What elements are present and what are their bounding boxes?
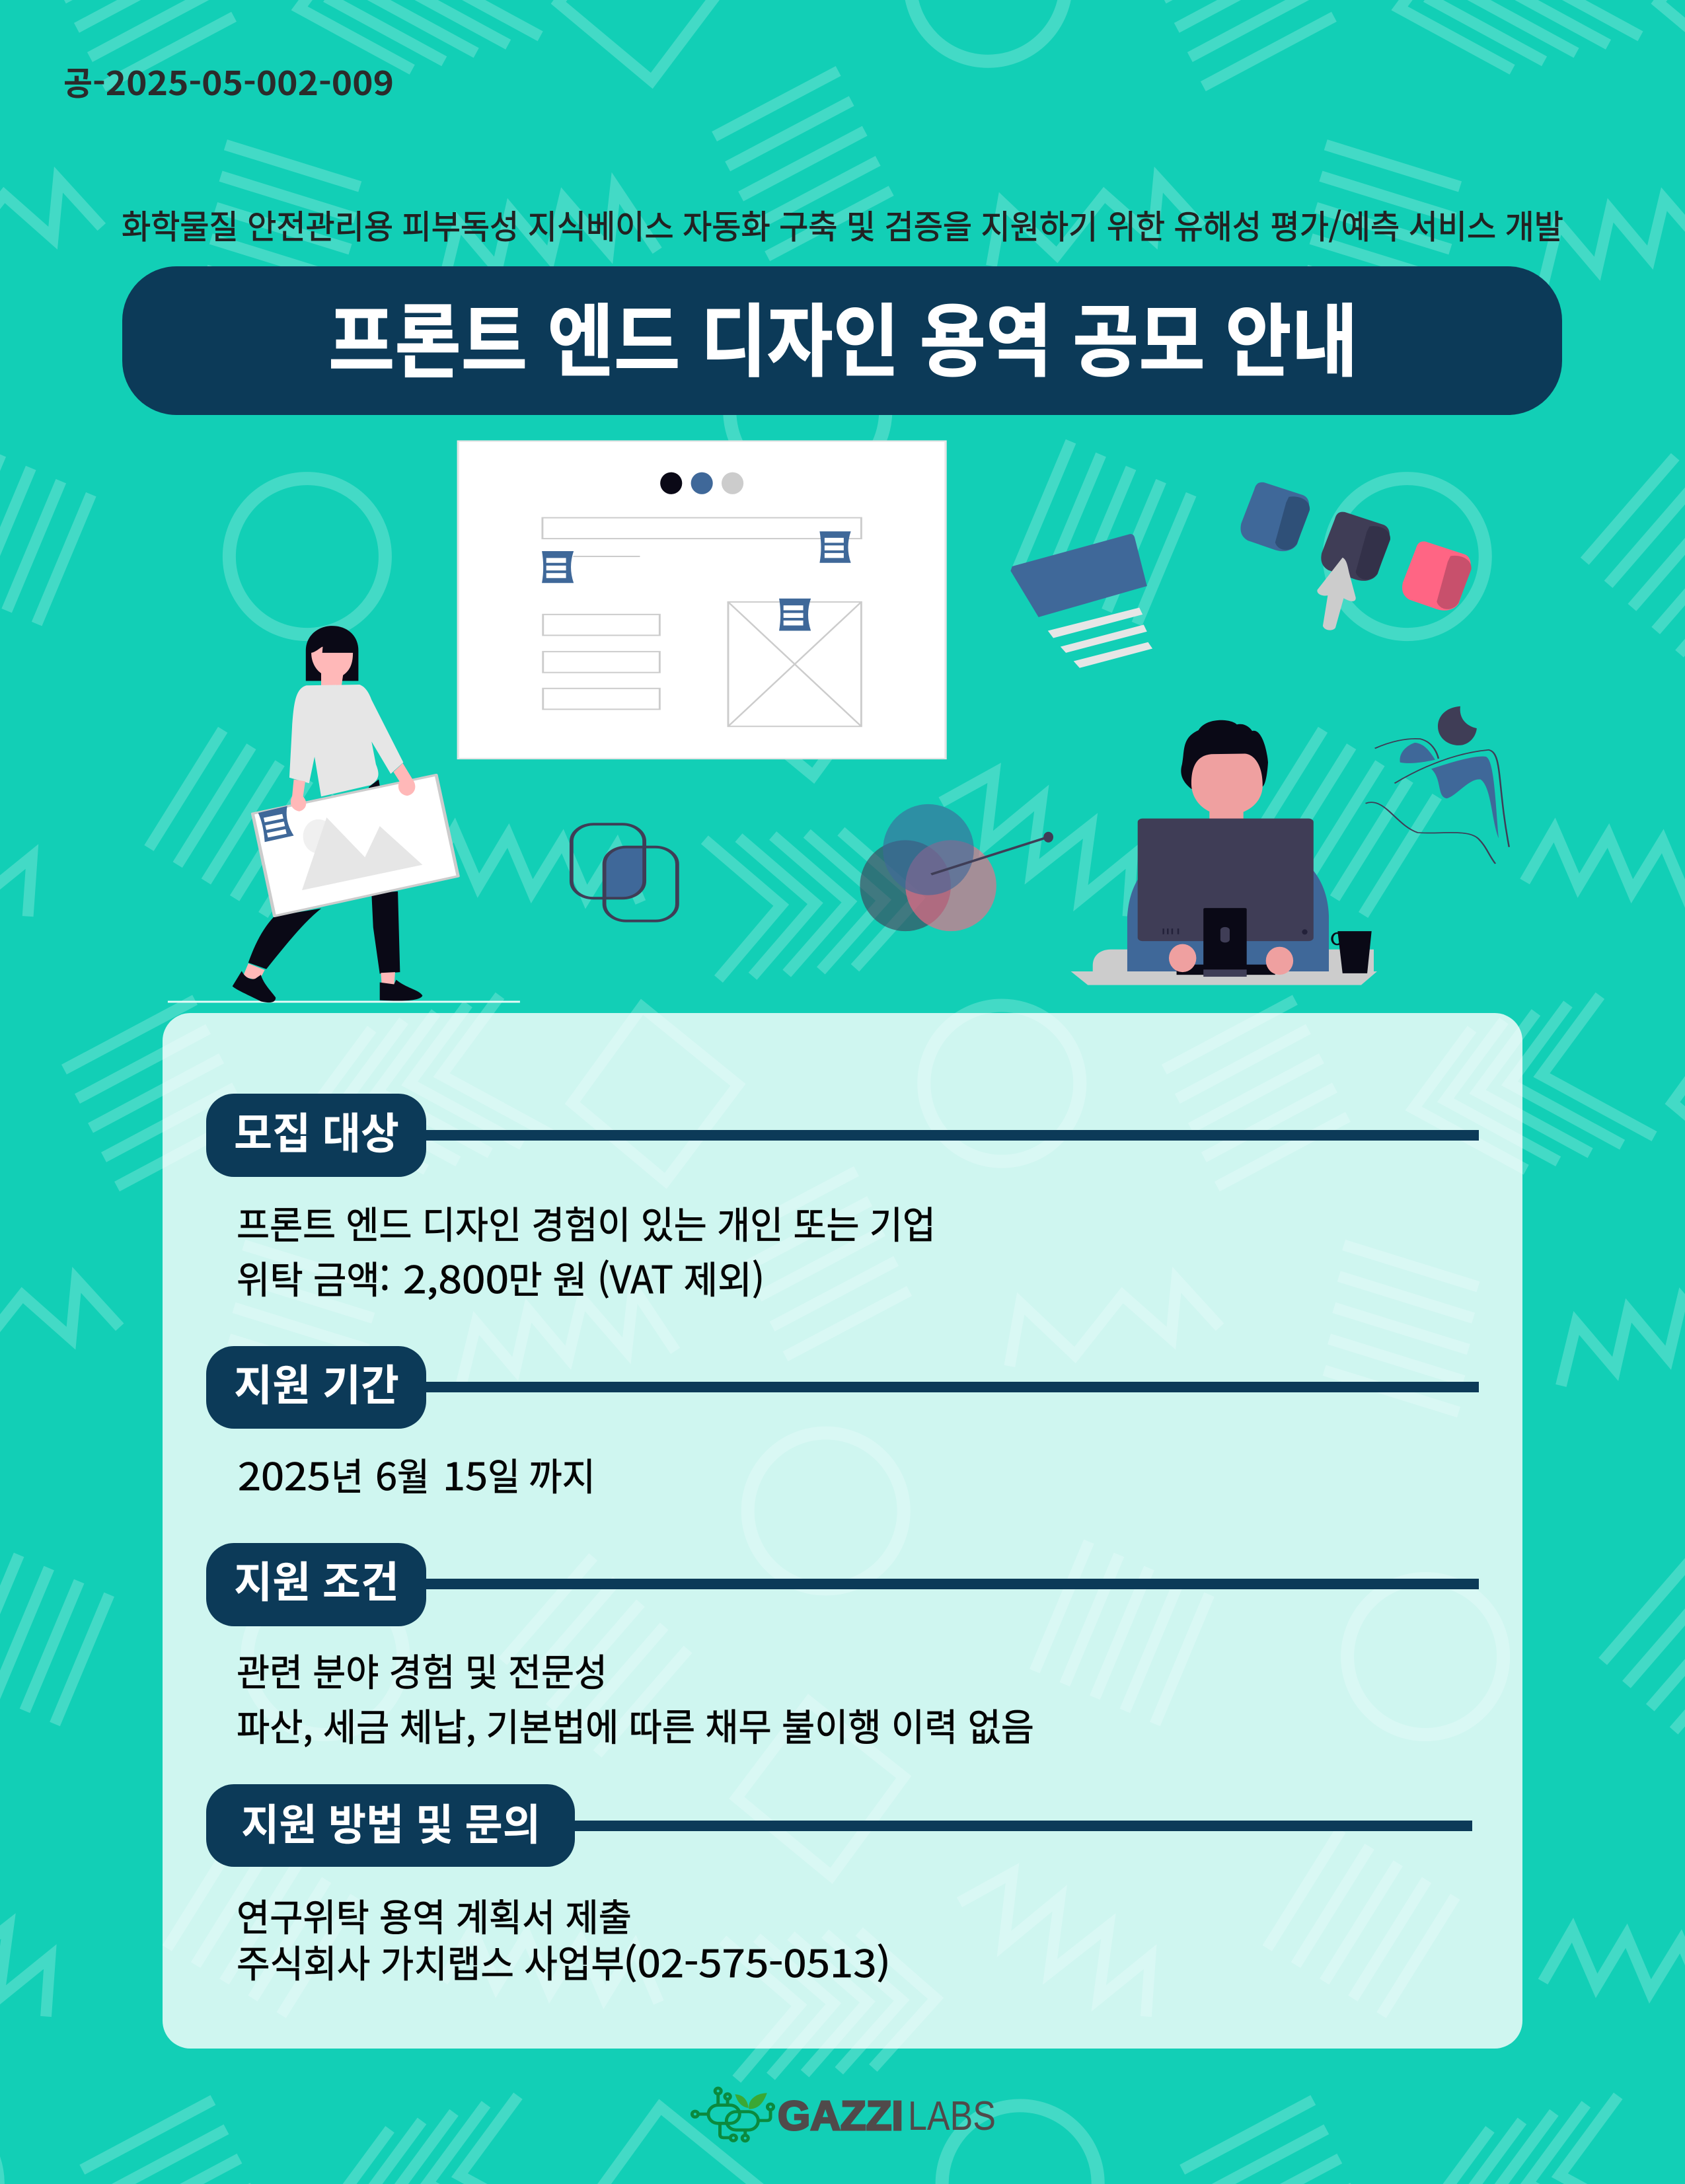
logo: GAZZI LABS: LABS <box>908 2093 996 2139</box>
text: method details: 연구위탁 용역 계획서 제출 <box>237 1888 632 1942</box>
document number: 공 <box>63 57 93 105</box>
section: application period <box>206 1346 1479 1429</box>
text: period details: 년 <box>331 1447 363 1501</box>
text: target details <box>237 1195 936 1304</box>
section: application method and inquiry <box>206 1784 1472 1867</box>
text: target details: 프론트 엔드 디자인 경험이 있는 개인 또는 기업 <box>237 1195 936 1250</box>
logo: GAZZI LABS: GAZZI <box>778 2093 903 2139</box>
text: method details: 주식회사 가치랩스 사업부 <box>237 1934 624 1988</box>
subtitle: 화학물질 안전관리용 피부독성 지식베이스 자동화 구축 및 검증을 지원하기 위한 유해성 평가/예측 서비스 개발 <box>122 201 1563 248</box>
icon: card with lines <box>1010 534 1152 668</box>
section: recruitment target <box>206 1094 1479 1177</box>
icon: document badge <box>819 531 851 563</box>
illustration: wireframe window <box>458 441 946 759</box>
title banner: 프론트 엔드 디자인 용역 공모 안내 <box>328 278 1358 393</box>
text: period details: 월 <box>397 1447 430 1501</box>
text: requirements details: 파산, 세금 체납, 기본법에 따른 채무 불이행 이력 없음 <box>237 1698 1034 1752</box>
text: method details <box>237 1888 891 1988</box>
text: period details <box>238 1447 595 1501</box>
text: period details: 까지 <box>529 1447 595 1501</box>
section: application period: 지원 기간 <box>234 1351 399 1413</box>
text: target details: 만 원 (VAT 제외) <box>508 1250 765 1304</box>
text: requirements details: 관련 분야 경험 및 전문성 <box>237 1643 607 1697</box>
text: target details: 위탁 금액: <box>237 1250 390 1304</box>
icon: color venn circles with pointer <box>860 804 1053 931</box>
section: recruitment target: 모집 대상 <box>234 1099 399 1161</box>
icon: document badge <box>779 599 811 631</box>
text: requirements details <box>237 1643 1034 1752</box>
icon: document badge <box>542 551 574 583</box>
section: application requirements: 지원 조건 <box>234 1548 399 1610</box>
document number: -2025-05-002-009 <box>93 57 394 105</box>
text: period details: 일 <box>488 1447 520 1501</box>
title banner <box>122 266 1562 415</box>
icon: color swatches and cursor <box>1240 482 1472 630</box>
icon: plant line art <box>1366 706 1509 864</box>
logo: GAZZI LABS <box>692 2088 996 2141</box>
text: period details: 6 <box>375 1447 397 1501</box>
panel: details <box>163 1013 1522 2049</box>
illustration: man at desk with monitor <box>1071 720 1377 985</box>
icon: overlapping rounded squares <box>572 824 677 921</box>
section: application method and inquiry: 지원 방법 및 문의 <box>241 1790 541 1852</box>
text: period details: 15 <box>443 1447 488 1501</box>
section: application requirements <box>206 1543 1479 1626</box>
text: period details: 2025 <box>238 1447 330 1501</box>
illustration: woman carrying picture board <box>168 626 520 1002</box>
text: method details: (02-575-0513) <box>623 1934 891 1988</box>
text: target details: 2,800 <box>403 1250 509 1304</box>
